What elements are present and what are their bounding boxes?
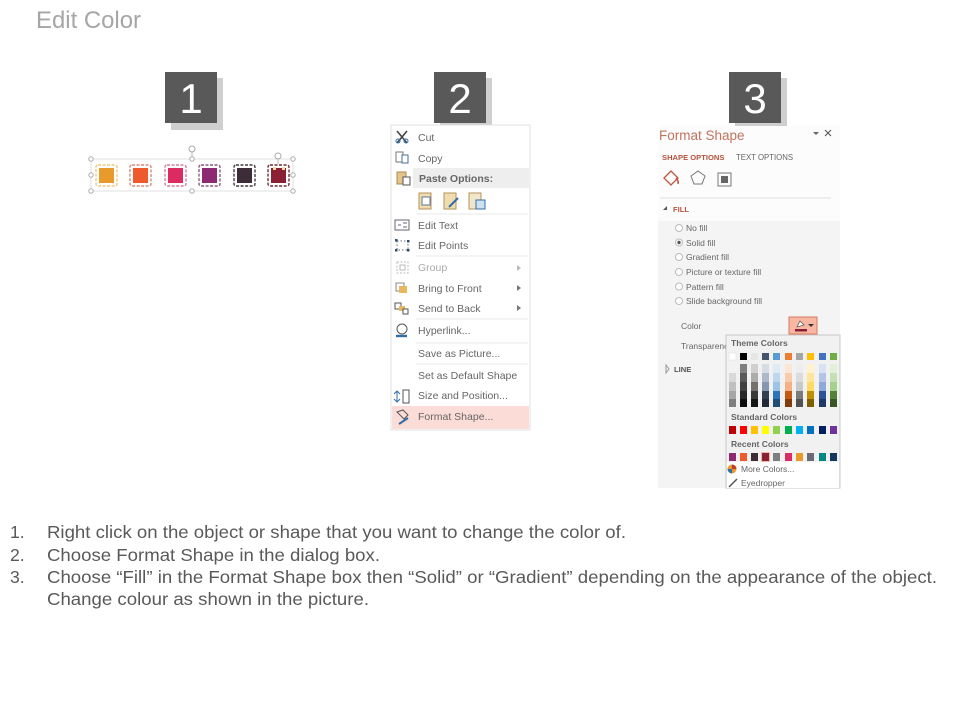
fill heading: FILL bbox=[673, 205, 689, 214]
fill options: No fill bbox=[686, 223, 707, 233]
colour picker dropdown: Theme Colors bbox=[731, 338, 788, 348]
menu labels: Format Shape... bbox=[418, 411, 493, 423]
step badge 1: 1 bbox=[179, 75, 203, 122]
colour picker dropdown: Recent Colors bbox=[731, 439, 789, 449]
title: Edit Color bbox=[36, 7, 141, 34]
more colours: More Colors... bbox=[741, 464, 794, 474]
menu labels: Set as Default Shape bbox=[418, 370, 517, 382]
panel tabs bbox=[662, 153, 793, 162]
menu labels: Paste Options: bbox=[419, 173, 493, 185]
step badge 2 bbox=[434, 72, 492, 130]
colour button bbox=[789, 317, 817, 334]
fill options bbox=[676, 223, 762, 351]
numbered instructions: 2. bbox=[10, 545, 25, 565]
step badge 3: 3 bbox=[743, 75, 767, 122]
recent colours bbox=[729, 452, 837, 462]
theme colour grid bbox=[729, 353, 837, 407]
fill options: Gradient fill bbox=[686, 252, 729, 262]
numbered instructions: 3. bbox=[10, 567, 25, 587]
menu labels: Edit Text bbox=[418, 220, 458, 232]
line heading bbox=[666, 365, 691, 374]
fill options: Color bbox=[681, 321, 701, 331]
step badge 1 bbox=[165, 72, 223, 130]
numbered instructions: Right click on the object or shape that you want to change the color of. bbox=[47, 522, 626, 542]
panel tab icons bbox=[664, 171, 731, 186]
step badge 3 bbox=[729, 72, 787, 130]
menu labels: Group bbox=[418, 262, 447, 274]
line heading: LINE bbox=[674, 365, 691, 374]
fill options: Pattern fill bbox=[686, 282, 724, 292]
menu labels: Send to Back bbox=[418, 303, 481, 315]
standard colours bbox=[729, 426, 837, 434]
numbered instructions: 1. bbox=[10, 522, 25, 542]
fill options: Transparency bbox=[681, 341, 733, 351]
panel tabs: SHAPE OPTIONS bbox=[662, 153, 724, 162]
selected colour swatches bbox=[89, 146, 295, 193]
format shape panel bbox=[658, 126, 840, 488]
numbered instructions: Change colour as shown in the picture. bbox=[47, 589, 369, 609]
fill options: Solid fill bbox=[686, 238, 715, 248]
menu labels: Copy bbox=[418, 153, 443, 165]
format shape highlight bbox=[392, 406, 529, 429]
fill options: Picture or texture fill bbox=[686, 267, 761, 277]
fill options: Slide background fill bbox=[686, 296, 762, 306]
numbered instructions bbox=[10, 522, 937, 609]
menu labels: Hyperlink... bbox=[418, 325, 471, 337]
menu labels: Bring to Front bbox=[418, 283, 482, 295]
colour picker dropdown bbox=[726, 335, 840, 488]
numbered instructions: Choose Format Shape in the dialog box. bbox=[47, 545, 380, 565]
numbered instructions: Choose “Fill” in the Format Shape box then “Solid” or “Gradient” depending on the appearance of the object. bbox=[47, 567, 937, 587]
colour picker dropdown: Standard Colors bbox=[731, 412, 797, 422]
panel title: Format Shape bbox=[659, 128, 745, 143]
menu labels bbox=[418, 132, 517, 423]
submenu arrows bbox=[517, 265, 521, 311]
menu labels: Save as Picture... bbox=[418, 348, 500, 360]
step badge 2: 2 bbox=[448, 75, 472, 122]
menu labels: Edit Points bbox=[418, 240, 468, 252]
context menu bbox=[391, 125, 530, 430]
paste options highlight bbox=[413, 168, 529, 188]
menu labels: Cut bbox=[418, 132, 434, 144]
eyedropper: Eyedropper bbox=[741, 478, 785, 488]
panel close controls bbox=[813, 130, 831, 136]
panel tabs: TEXT OPTIONS bbox=[736, 153, 793, 162]
menu icons bbox=[394, 131, 485, 424]
menu labels: Size and Position... bbox=[418, 390, 508, 402]
fill heading bbox=[663, 205, 689, 214]
